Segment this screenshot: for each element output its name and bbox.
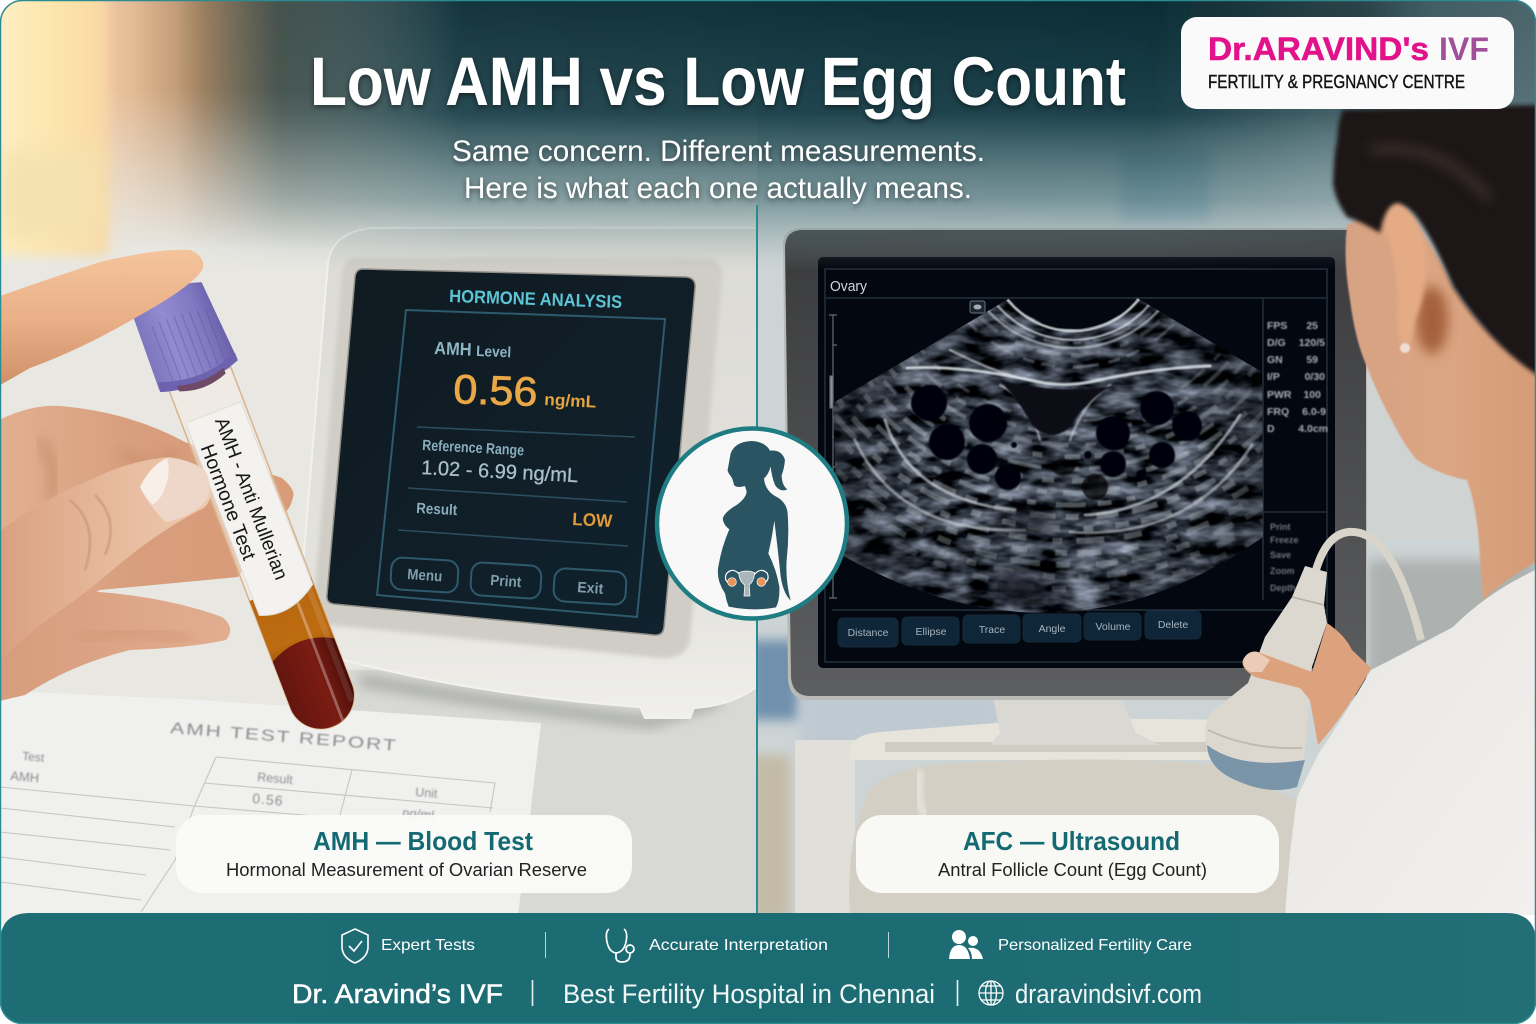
icon: globe [979, 981, 1003, 1005]
right pill label: Antral Follicle Count (Egg Count) [938, 859, 1207, 880]
scan parameter list: 0/30 [1305, 371, 1325, 383]
website: draravindsivf.com [1015, 979, 1202, 1009]
subtitle: Here is what each one actually means. [464, 172, 972, 205]
ear [1385, 205, 1425, 343]
scan parameter list: 25 [1306, 320, 1318, 332]
hair [1333, 105, 1536, 377]
scan parameter list: 120/5 [1299, 337, 1325, 349]
feature: accurate interpretation: Accurate Interpretation [649, 937, 828, 954]
right pill label [856, 815, 1279, 893]
panel: AMH blood test photo [0, 0, 775, 925]
analyzer screen readout: 1.02 - 6.99 ng/mL [421, 457, 579, 487]
screen label: ovary: Ovary [830, 278, 867, 295]
hormone analyzer device [300, 228, 775, 722]
test report paper: Test [22, 749, 46, 765]
scan parameter list: I/P [1267, 371, 1280, 383]
dark blood [272, 637, 354, 729]
amber serum [249, 577, 338, 671]
patient head [1333, 105, 1536, 600]
blurred secondary menu: Depth [1270, 583, 1296, 593]
analyzer screen readout: Exit [577, 579, 604, 598]
right pill label: AFC — Ultrasound [963, 826, 1180, 856]
hand front: thumb and index finger [0, 250, 211, 665]
clinic name: Dr. Aravind’s IVF [292, 979, 503, 1009]
analyzer screen readout: AMH Level [434, 338, 512, 361]
ultrasound monitor [783, 228, 1367, 700]
left pill label [176, 815, 632, 893]
test report paper: AMH TEST REPORT [170, 720, 398, 755]
tube label: AMH - Anti Mullerian [210, 414, 292, 583]
tube label [186, 401, 318, 620]
left pill label: Hormonal Measurement of Ovarian Reserve [226, 859, 587, 880]
blood collection tube [134, 282, 355, 730]
analyzer screen readout: HORMONE ANALYSIS [449, 286, 622, 312]
analyzer screen readout: Reference Range [422, 437, 525, 459]
hospital tagline: Best Fertility Hospital in Chennai [563, 979, 935, 1009]
analyzer screen readout: ng/mL [544, 390, 597, 412]
test report paper: ng/mL [402, 805, 439, 823]
purple cap [134, 282, 238, 392]
scan parameter list: D/G [1267, 337, 1286, 349]
test report paper: 0.56 [252, 790, 284, 809]
analyzer screen readout: 0.56 [453, 366, 538, 415]
monitor stand [990, 700, 1160, 745]
uterus icon [725, 570, 768, 596]
test report paper: AMH [10, 768, 40, 786]
scan parameter list: 4.0cm [1298, 423, 1328, 435]
scan parameter list: 6.0-9 [1302, 406, 1326, 418]
scan parameter list: D [1267, 423, 1275, 435]
tube label: Hormone Test [196, 441, 260, 564]
probe body [1206, 566, 1327, 764]
hair highlight [1370, 149, 1490, 200]
ultrasound fan image with follicles [833, 298, 1263, 613]
left pill label: AMH — Blood Test [313, 826, 533, 856]
central badge: female silhouette with reproductive system [657, 428, 847, 618]
logo card: IVF [1439, 31, 1489, 67]
room background behind bed [750, 640, 1000, 920]
test report paper: Unit [415, 785, 439, 801]
ultrasound probe in hand [1205, 532, 1421, 790]
window light [0, 0, 460, 255]
tabletop [330, 670, 770, 920]
blurred secondary menu: Print [1270, 522, 1291, 532]
scan parameter list [1267, 320, 1328, 435]
patient shoulder in white coat [1285, 568, 1536, 915]
scan parameter list: 100 [1303, 389, 1321, 401]
hand behind tube: middle fingers [0, 406, 294, 702]
subtitle: Same concern. Different measurements. [452, 135, 985, 168]
top teal gradient overlay [186, 0, 1536, 264]
blurred secondary menu: Freeze [1270, 535, 1299, 545]
depth scale [829, 315, 837, 598]
earring [1400, 343, 1410, 353]
ear shadow [1416, 286, 1448, 354]
measurement tool buttons: Angle [1039, 623, 1066, 635]
bed and pillow [849, 718, 1297, 913]
center divider line [756, 205, 758, 913]
feature: personalized care: Personalized Fertility Care [998, 937, 1192, 954]
gripping hand [1242, 623, 1371, 745]
analyzer screen readout: Menu [407, 566, 443, 585]
test report paper [0, 690, 541, 925]
footer bar [0, 913, 1536, 1024]
blurred secondary menu [1270, 522, 1299, 593]
analyzer screen readout: Print [490, 572, 522, 591]
measurement tool buttons: Delete [1158, 619, 1188, 631]
measurement tool buttons: Volume [1095, 621, 1131, 633]
scan parameter list: GN [1267, 354, 1283, 366]
feature: personalized care [949, 930, 1192, 959]
measurement tool buttons: Distance [848, 627, 889, 639]
analyzer screen readout: LOW [572, 509, 613, 531]
measurement tool buttons: Ellipse [916, 626, 947, 638]
logo card [1181, 17, 1514, 109]
scan parameter list: FRQ [1267, 406, 1289, 418]
small scan icon [970, 301, 985, 313]
panel: AFC ultrasound photo [708, 0, 1536, 920]
feature: expert tests: Expert Tests [381, 937, 475, 954]
measurement tool buttons [838, 611, 1201, 647]
neck and cheek [1346, 200, 1536, 600]
logo card: FERTILITY & PREGNANCY CENTRE [1208, 72, 1465, 92]
test report paper: Result [257, 770, 294, 787]
silhouette [718, 441, 791, 609]
analyzer screen readout: Result [416, 500, 458, 519]
blurred secondary menu: Save [1270, 550, 1291, 560]
title: Low AMH vs Low Egg Count [310, 43, 1126, 120]
feature: accurate interpretation [606, 929, 828, 962]
scan parameter list: 59 [1306, 354, 1318, 366]
analyzer screen readout [377, 286, 665, 617]
blurred secondary menu: Zoom [1270, 566, 1294, 576]
measurement tool buttons: Trace [979, 624, 1005, 636]
scan parameter list: FPS [1267, 320, 1287, 332]
logo card: Dr.ARAVIND's [1208, 31, 1429, 67]
subtitle [452, 135, 985, 205]
scan parameter list: PWR [1267, 389, 1292, 401]
feature: expert tests [342, 929, 475, 963]
